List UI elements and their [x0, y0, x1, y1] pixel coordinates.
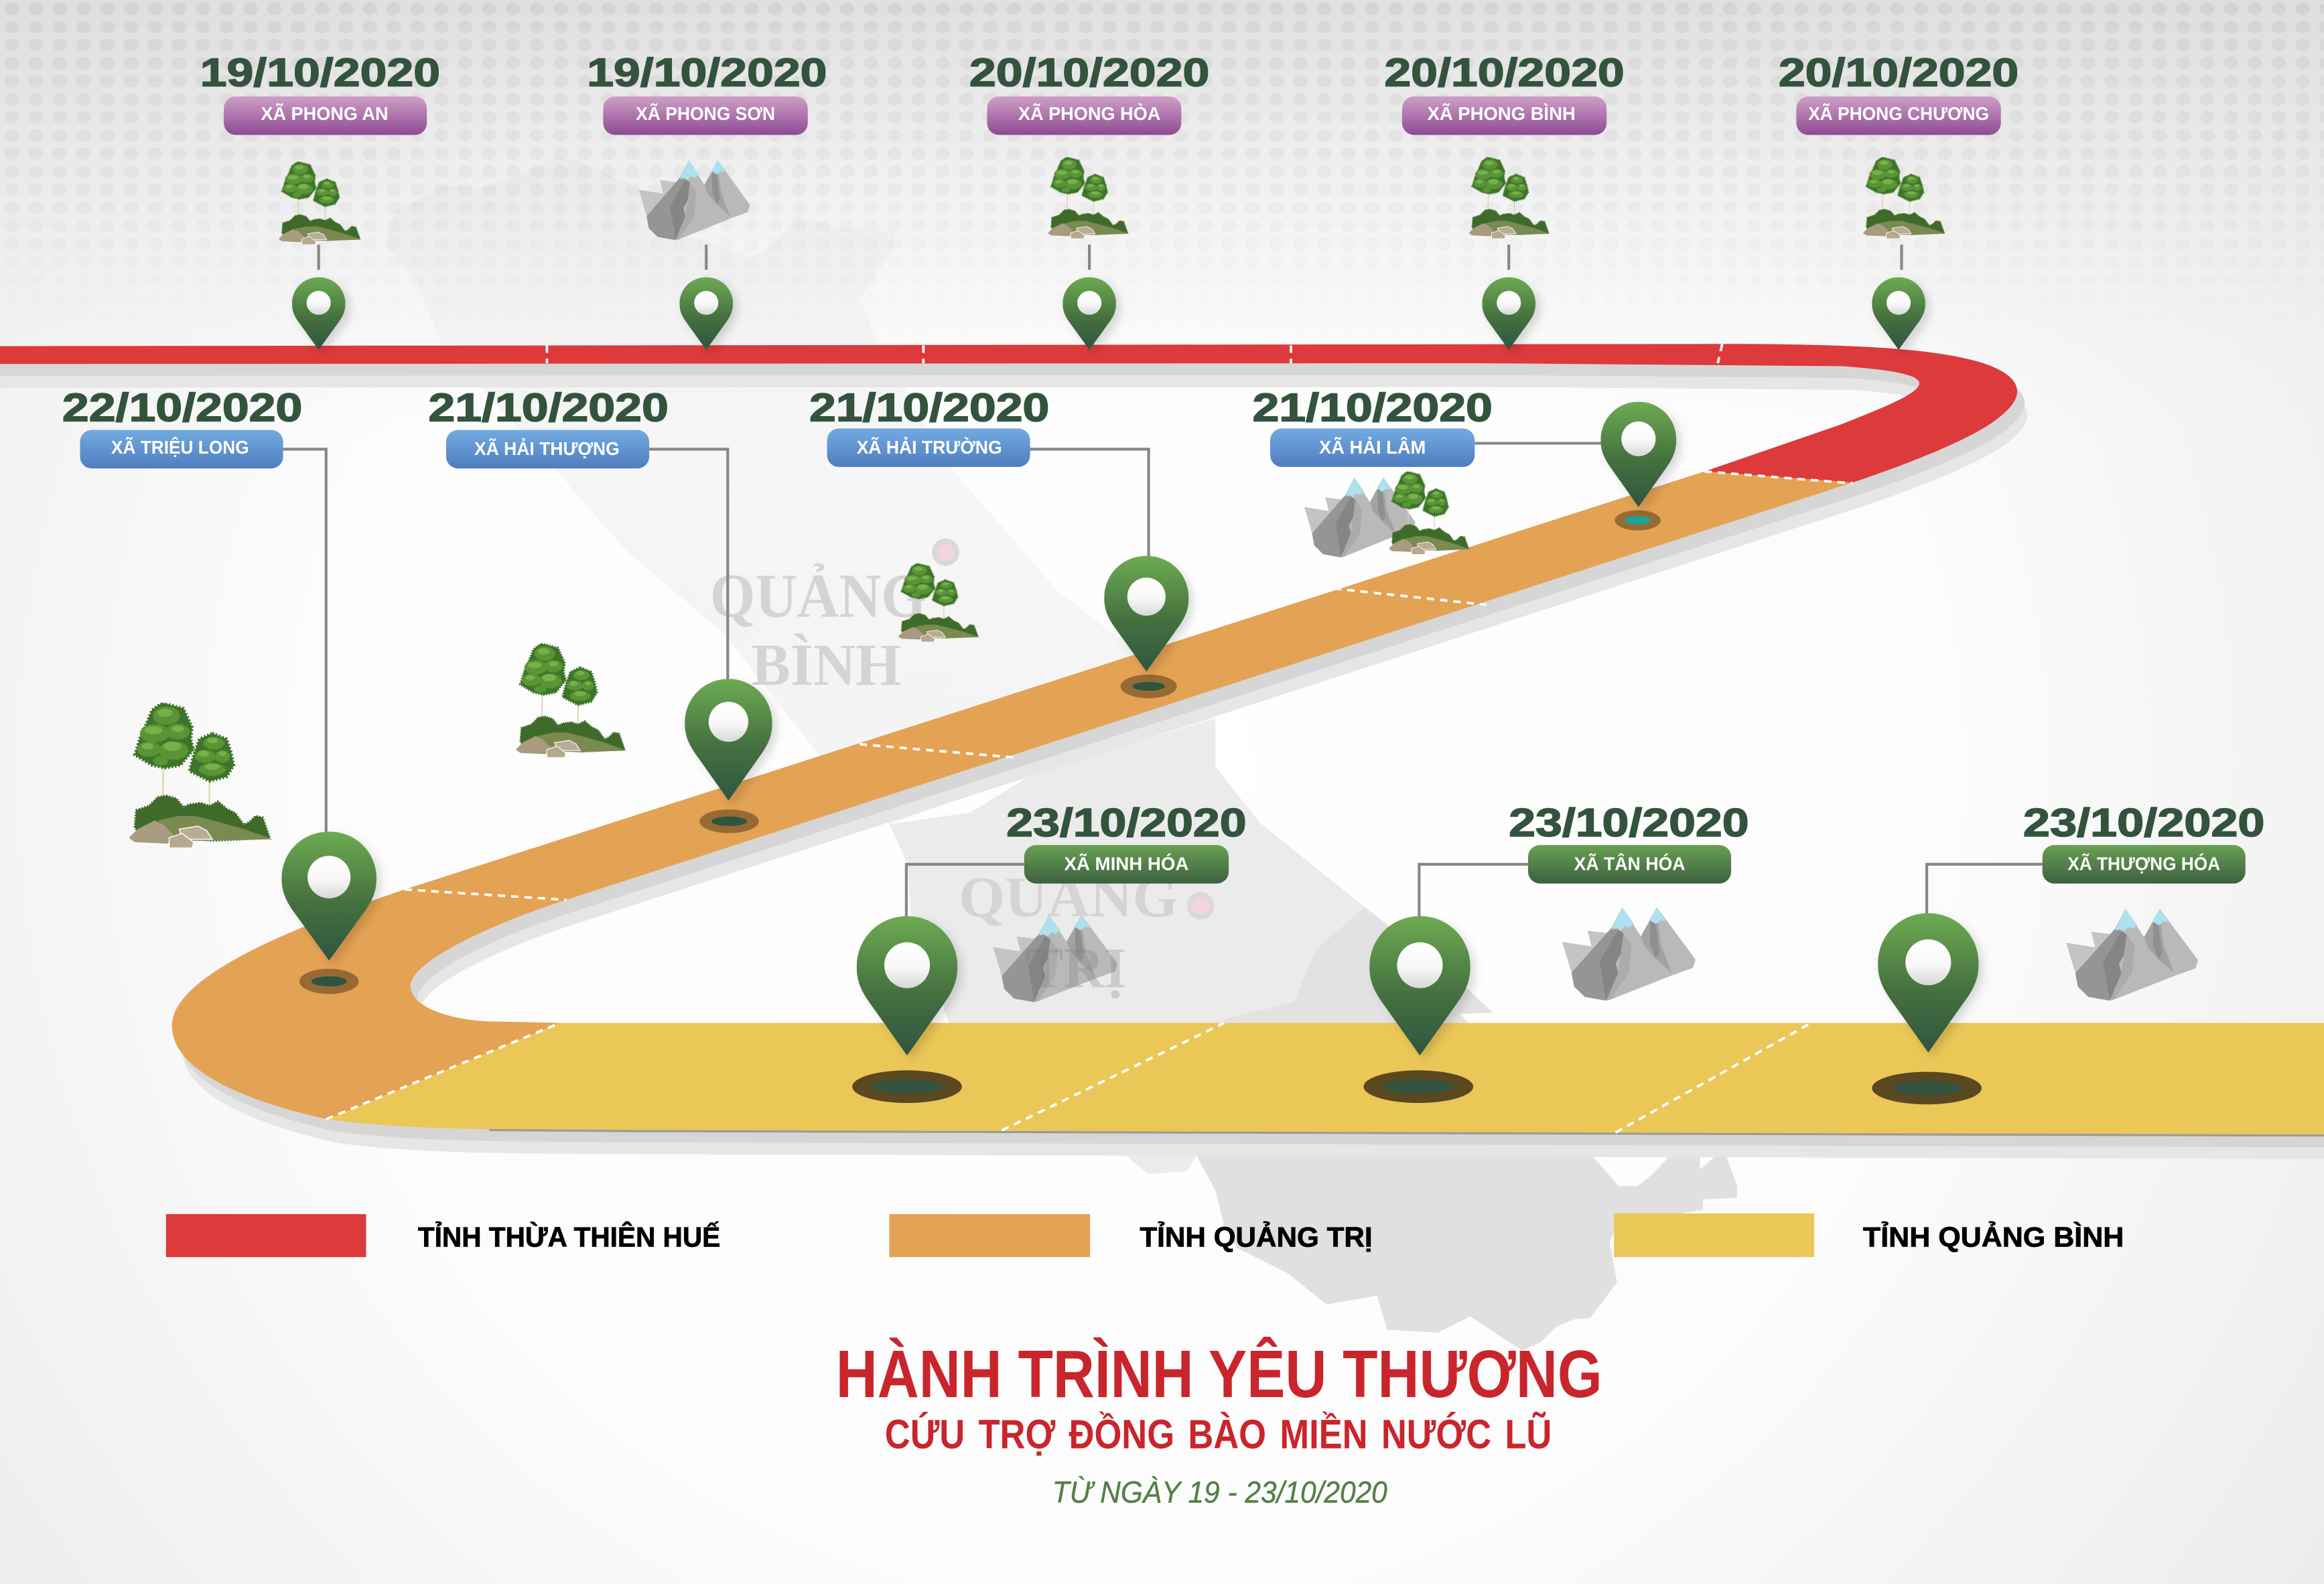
- watermark: Trị over mountain: TRỊ: [1026, 935, 1126, 1000]
- illustration: trees Phong Chương: [1863, 157, 1946, 239]
- illustration: mountain Hải Lâm: [1304, 477, 1416, 557]
- illustration: trees Triệu Long: [129, 703, 273, 848]
- stop: Xã Hải Lâm: 21/10/2020: [1252, 385, 1493, 430]
- road shadow outer: [0, 368, 2324, 1159]
- stop: Xã Phong Sơn: XÃ PHONG SƠN: [636, 103, 775, 124]
- stop: Xã Thượng Hóa: XÃ THƯỢNG HÓA: [2067, 854, 2220, 874]
- illustration: mountain Tân Hóa: [1562, 907, 1696, 1000]
- stop: Xã Tân Hóa: [1509, 800, 1749, 884]
- title: HÀNH TRÌNH YÊU THƯƠNG: [836, 1337, 1602, 1412]
- map silhouette: [385, 157, 1737, 1351]
- watermark: Quảng Trị name: QUẢNG: [959, 864, 1178, 929]
- stop: Xã Hải Thượng: XÃ HẢI THƯỢNG: [474, 438, 620, 459]
- watermark: Quảng Bình: BÌNH: [752, 633, 901, 698]
- pin: Phong Hòa: [1063, 277, 1116, 350]
- illustration: trees Phong Hòa: [1048, 157, 1130, 239]
- legend: [166, 1213, 2124, 1257]
- pin: Hải Trường: [1104, 556, 1188, 698]
- stop: Xã Tân Hóa: 23/10/2020: [1509, 800, 1749, 845]
- pin: Phong Chương: [1872, 277, 1925, 350]
- subtitle: CỨU TRỢ ĐỒNG BÀO MIỀN NƯỚC LŨ: [885, 1412, 1552, 1457]
- stop: Xã Phong An: [200, 50, 440, 135]
- map: Quảng Bình: [385, 157, 1215, 824]
- pin: Thượng Hóa: [1872, 913, 1982, 1104]
- watermark: Quảng Bình: QUẢNG: [710, 562, 927, 631]
- stop: Xã Minh Hóa: XÃ MINH HÓA: [1064, 854, 1188, 874]
- map: Quảng Trị: [889, 719, 1493, 1038]
- stop: Xã Phong Bình: XÃ PHONG BÌNH: [1428, 103, 1576, 124]
- stop: Xã Hải Lâm: [1252, 385, 1493, 467]
- connectors middle and bottom rows: [283, 444, 2043, 922]
- road commune dividers: [326, 344, 1852, 1132]
- stop: Xã Thượng Hóa: 23/10/2020: [2023, 800, 2265, 845]
- road: Quảng Bình segment (yellow): [328, 1023, 2324, 1136]
- stop: Xã Hải Trường: [809, 385, 1049, 467]
- pin: Triệu Long: [281, 832, 377, 994]
- stop: Xã Thượng Hóa: [2023, 800, 2265, 884]
- date range: TỪ NGÀY 19 - 23/10/2020: [1052, 1475, 1387, 1509]
- legend: Quảng Bình: [1614, 1213, 2124, 1257]
- stop: Xã Phong Sơn: 19/10/2020: [587, 50, 827, 94]
- stop: Xã Phong Hòa: 20/10/2020: [969, 50, 1209, 94]
- pin: Phong Sơn: [679, 277, 733, 350]
- pin: Tân Hóa: [1363, 916, 1473, 1103]
- map: Quảng Trị shaded edge: [1223, 907, 1493, 1038]
- stop: Xã Triệu Long: [62, 385, 302, 468]
- stop: Xã Hải Trường: 21/10/2020: [809, 385, 1049, 430]
- stop: Xã Triệu Long: 22/10/2020: [62, 385, 302, 430]
- title block: [836, 1337, 1602, 1509]
- stop: Xã Triệu Long: XÃ TRIỆU LONG: [111, 437, 249, 458]
- dot texture: [5, 3, 2324, 157]
- stop: Xã Phong Hòa: [969, 50, 1209, 135]
- legend: Thừa Thiên Huế: TỈNH THỪA THIÊN HUẾ: [418, 1221, 720, 1253]
- pin: Minh Hóa: [852, 916, 962, 1103]
- stop: Xã Phong Chương: [1779, 50, 2019, 135]
- road: Quảng Trị segment (orange): [172, 472, 1852, 1119]
- stop: Xã Phong Hòa: XÃ PHONG HÒA: [1018, 103, 1160, 124]
- legend: Quảng Bình: TỈNH QUẢNG BÌNH: [1863, 1221, 2124, 1253]
- stop: Xã Hải Thượng: [428, 385, 669, 468]
- illustration: trees Phong Bình: [1468, 157, 1550, 239]
- legend: Quảng Trị: [889, 1214, 1373, 1257]
- illustration: mountain Thượng Hóa: [2066, 909, 2198, 1000]
- stop: Xã Hải Lâm: XÃ HẢI LÂM: [1319, 436, 1426, 458]
- legend: Thừa Thiên Huế: [166, 1214, 720, 1257]
- stop: Xã Phong Bình: [1384, 50, 1625, 135]
- pin: Phong An: [292, 277, 345, 350]
- map: Thừa Thiên Huế: [1193, 1149, 1737, 1351]
- stop: Xã Phong Chương: XÃ PHONG CHƯƠNG: [1808, 103, 1989, 124]
- road: Thừa Thiên Huế segment (red): [0, 344, 2017, 482]
- stop: Xã Hải Thượng: 21/10/2020: [428, 385, 669, 430]
- stop: Xã Phong An: XÃ PHONG AN: [261, 103, 389, 124]
- illustration: mountain Phong Sơn: [639, 160, 750, 240]
- stop: Xã Phong Sơn: [587, 50, 827, 135]
- stop: Xã Phong An: 19/10/2020: [200, 50, 440, 94]
- watermark: Quảng Bình: [710, 541, 957, 698]
- illustration: trees Hải Thượng: [516, 643, 627, 758]
- stop: Xã Minh Hóa: [1006, 800, 1247, 884]
- connectors top row: [319, 245, 1901, 270]
- map: Huế light edge: [1117, 1149, 1201, 1174]
- stop: Xã Minh Hóa: 23/10/2020: [1006, 800, 1247, 845]
- illustration: trees Phong An: [279, 161, 362, 245]
- stop: Xã Tân Hóa: XÃ TÂN HÓA: [1574, 854, 1685, 874]
- illustration: trees Hải Trường: [898, 564, 979, 642]
- legend: Quảng Trị: TỈNH QUẢNG TRỊ: [1140, 1221, 1373, 1253]
- pin: Hải Thượng: [685, 679, 772, 833]
- pin: Hải Lâm: [1600, 402, 1676, 531]
- road bottom edge line: [489, 1130, 2324, 1136]
- pin: Phong Bình: [1482, 277, 1535, 350]
- illustration: trees Hải Lâm: [1389, 472, 1471, 554]
- stop: Xã Phong Chương: 20/10/2020: [1779, 50, 2019, 94]
- stop: Xã Phong Bình: 20/10/2020: [1384, 50, 1625, 94]
- stop: Xã Hải Trường: XÃ HẢI TRƯỜNG: [857, 436, 1002, 458]
- road shadow inner: [0, 356, 2324, 1147]
- illustration: mountain Minh Hóa: [993, 915, 1117, 1002]
